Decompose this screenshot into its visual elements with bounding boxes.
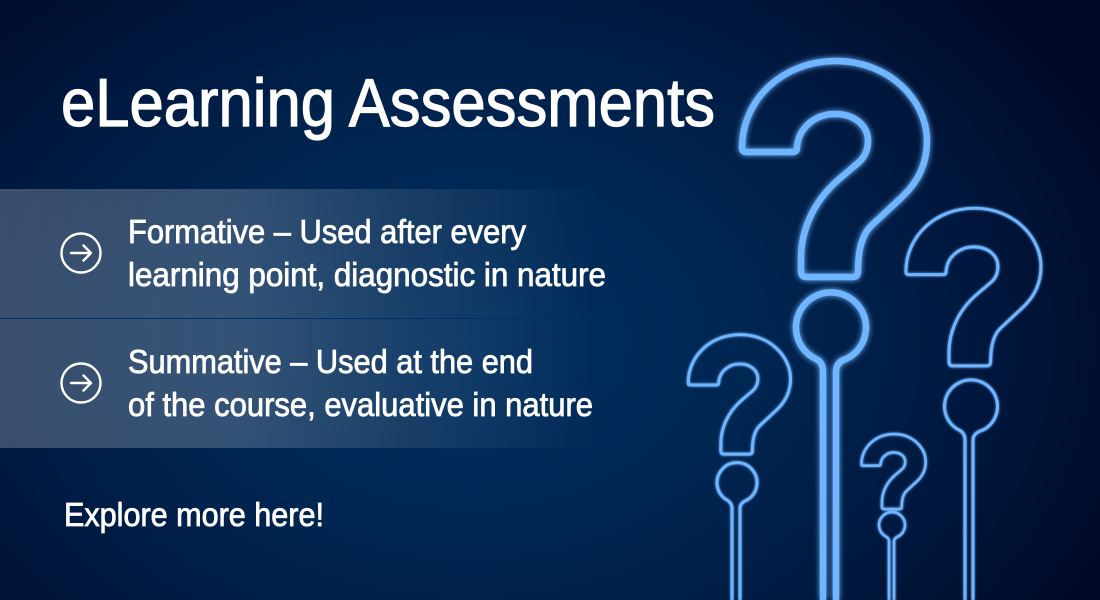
icon: arrow circle formative [62,234,100,272]
call to action: Explore more here! [64,496,324,533]
icon: small question mark [861,434,926,600]
text: summative line 1: Summative – Used at the end [128,343,533,380]
icon: left question mark [688,335,791,600]
title: eLearning Assessments [61,65,715,141]
text: formative line 2: learning point, diagnostic in nature [128,256,606,293]
icon: large question mark [742,61,927,600]
panel: assessment types band [0,189,600,448]
text: summative line 2: of the course, evaluative in nature [128,386,593,423]
text: formative line 1: Formative – Used after every [128,213,526,250]
icon: arrow circle summative [62,364,100,402]
icon: right question mark [906,208,1041,600]
